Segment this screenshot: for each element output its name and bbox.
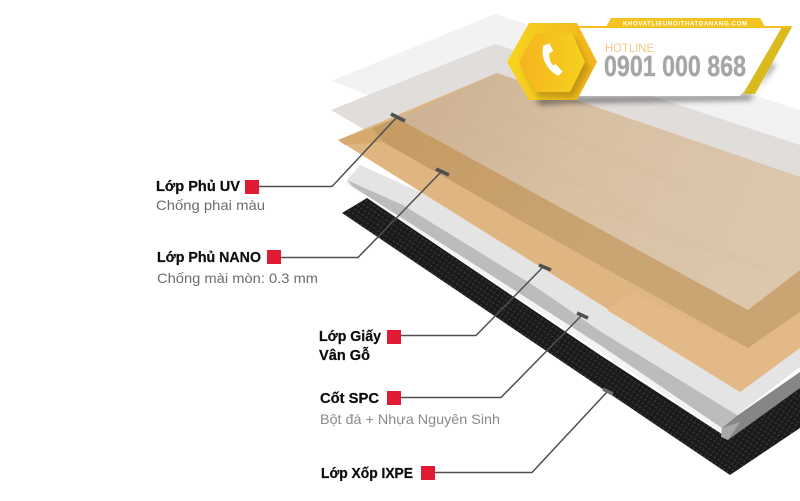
- layer: translucent wood coat: [397, 73, 800, 310]
- leader line: [259, 114, 405, 186]
- layer: SPC core top surface: [347, 165, 800, 415]
- label heading: Lớp Xốp IXPE: [321, 466, 413, 482]
- website tab: [606, 18, 765, 28]
- inner hexagon: [519, 33, 585, 92]
- leader line: [401, 265, 551, 336]
- red marker: [267, 250, 281, 264]
- leader line: [401, 313, 588, 398]
- callout: Lớp Phủ UV: [156, 114, 405, 213]
- label heading: Lớp Phủ UV: [156, 179, 240, 195]
- layer: SPC core edge: [345, 177, 800, 440]
- layer: clear UV coat: [331, 14, 800, 200]
- label heading: Lớp Phủ NANO: [157, 250, 261, 266]
- layer: wood grain paper: [338, 73, 800, 392]
- red marker: [387, 391, 401, 405]
- red marker: [387, 330, 401, 344]
- label heading second line: Vân Gỗ: [319, 347, 370, 364]
- banner shadow: [535, 62, 775, 105]
- callout: Cốt SPC: [320, 313, 588, 427]
- label description: Bột đá + Nhựa Nguyên Sinh: [320, 411, 500, 427]
- label heading: Cốt SPC: [320, 391, 380, 407]
- label heading: Lớp Giấy: [319, 329, 381, 345]
- outer hexagon: [507, 23, 597, 100]
- leader line: [435, 389, 613, 472]
- callout: Lớp Xốp IXPE: [321, 389, 613, 482]
- label description: Chống mài mòn: 0.3 mm: [157, 270, 318, 286]
- top yellow line: [570, 26, 792, 28]
- yellow right stripe: [743, 27, 792, 94]
- layer: nano coat: [331, 44, 800, 200]
- inner hexagon shadow: [523, 39, 589, 98]
- red marker: [245, 180, 259, 194]
- website tab: KHOVATLIEUNOITHATDANANG.COM: [623, 22, 747, 28]
- layer: black IXPE foam: [342, 198, 800, 475]
- icon: phone handset: [543, 43, 563, 76]
- white banner body: [570, 28, 780, 96]
- red marker: [421, 466, 435, 480]
- callout: Lớp Phủ NANO: [157, 169, 449, 286]
- phone number: 0901 000 868: [604, 51, 746, 83]
- leader line: [281, 169, 449, 258]
- flooring layers diagram: [331, 14, 800, 475]
- label description: Chống phai màu: [156, 197, 265, 213]
- hotline label: HOTLINE: [605, 43, 654, 55]
- callout: Lớp Giấy Vân Gỗ: [319, 265, 551, 364]
- hotline banner: [507, 18, 792, 105]
